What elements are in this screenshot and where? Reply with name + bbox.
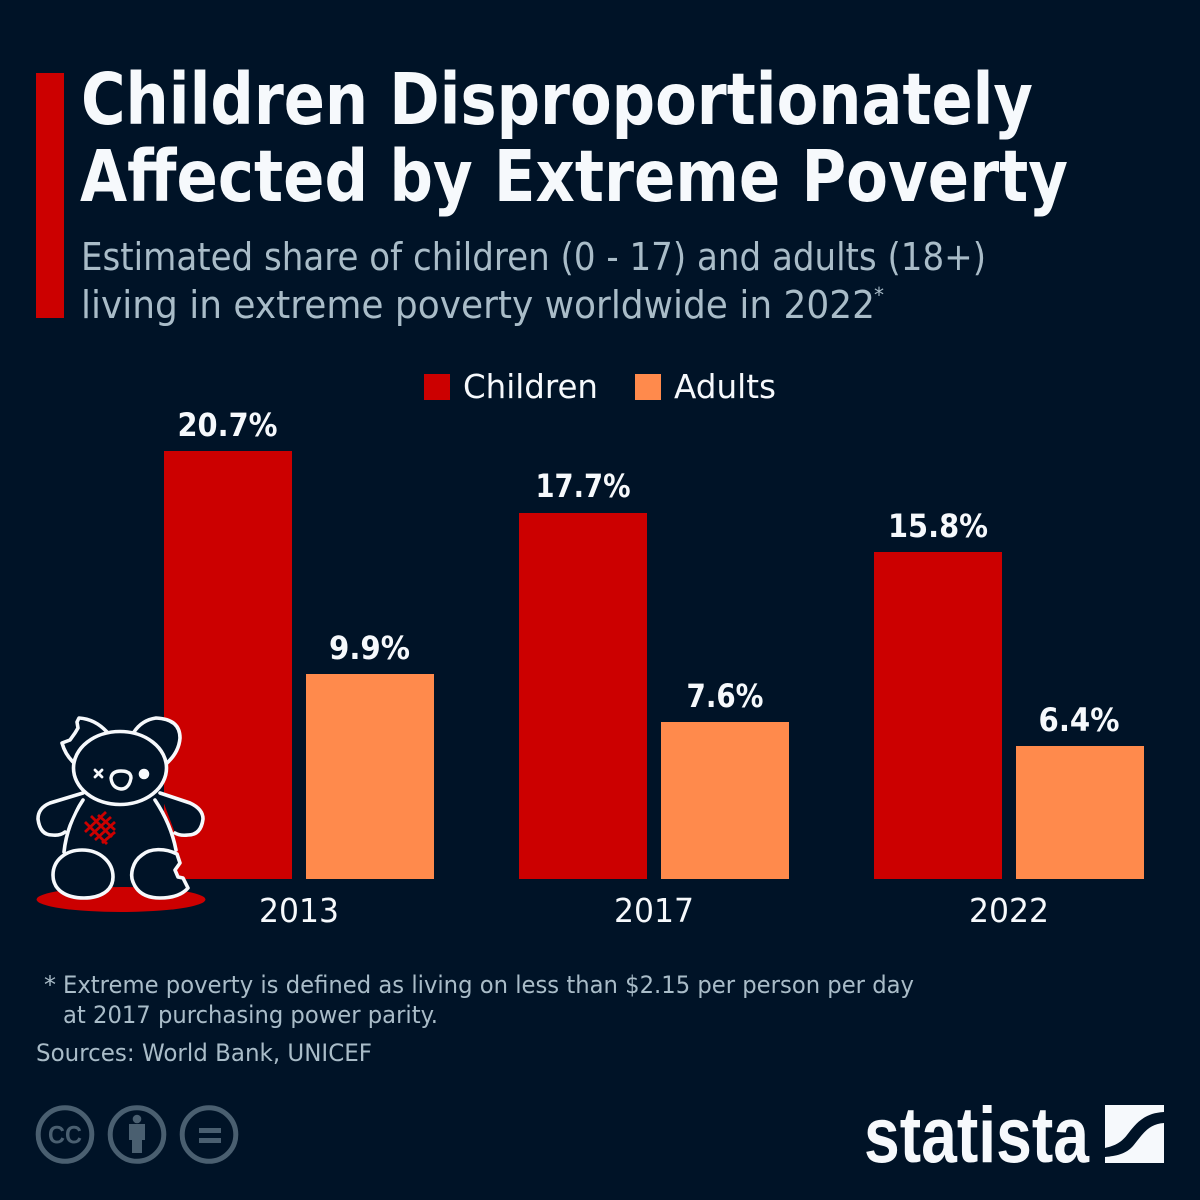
- bars: 2017: 17.7%: [536, 467, 630, 505]
- sources: Sources: World Bank, UNICEF: [36, 1039, 372, 1067]
- eye: [139, 769, 149, 779]
- right foot: [132, 850, 188, 898]
- title: [80, 58, 1068, 218]
- bars: 2013: 20.7%: [178, 406, 278, 444]
- bars: 2017: 7.6%: [686, 677, 764, 715]
- subtitle: Estimated share of children (0 - 17) and adults (18+): [81, 235, 986, 279]
- left arm: [38, 793, 83, 835]
- subtitle: *: [874, 283, 884, 307]
- icon: teddy bear: [36, 718, 206, 912]
- left foot: [53, 850, 113, 898]
- bars: 2017: 2017: [614, 891, 694, 930]
- title: Children Disproportionately: [81, 58, 1033, 141]
- footnote: *: [44, 971, 56, 999]
- bars: 2022: [874, 507, 1144, 930]
- bars: 2013: 2013: [259, 891, 339, 930]
- right ear: [134, 718, 180, 763]
- bars: 2022: 2022: [969, 891, 1049, 930]
- stitched patch: [85, 812, 115, 844]
- left ear: [62, 718, 107, 762]
- bars: 2017: [519, 467, 789, 930]
- bear body fill: [64, 798, 178, 887]
- nose: [111, 771, 131, 789]
- bar chart: [164, 406, 1144, 930]
- bars: 2022: 15.8%: [888, 507, 988, 545]
- footnote: Extreme poverty is defined as living on less than $2.15 per person per day: [63, 971, 914, 999]
- logo mark: [1105, 1105, 1164, 1148]
- subtitle: [81, 235, 986, 327]
- legend: Adults: [674, 367, 776, 406]
- icon: cc licence: CC: [48, 1122, 82, 1150]
- footnote: [44, 971, 914, 1029]
- accent bar: [36, 73, 64, 318]
- bars: 2022: 6.4%: [1038, 701, 1120, 739]
- right arm: [160, 793, 203, 835]
- statista logo: statista: [864, 1090, 1090, 1179]
- legend: [424, 367, 776, 406]
- title: Affected by Extreme Poverty: [80, 135, 1068, 218]
- head: [74, 732, 166, 804]
- eye cross: [95, 770, 102, 777]
- subtitle: living in extreme poverty worldwide in 2022: [81, 283, 875, 327]
- footnote: at 2017 purchasing power parity.: [63, 1001, 438, 1029]
- legend: Children: [463, 367, 598, 406]
- bars: 2013: 9.9%: [329, 629, 410, 667]
- icon: cc licence: [38, 1108, 236, 1161]
- bars: 2013: [164, 406, 434, 930]
